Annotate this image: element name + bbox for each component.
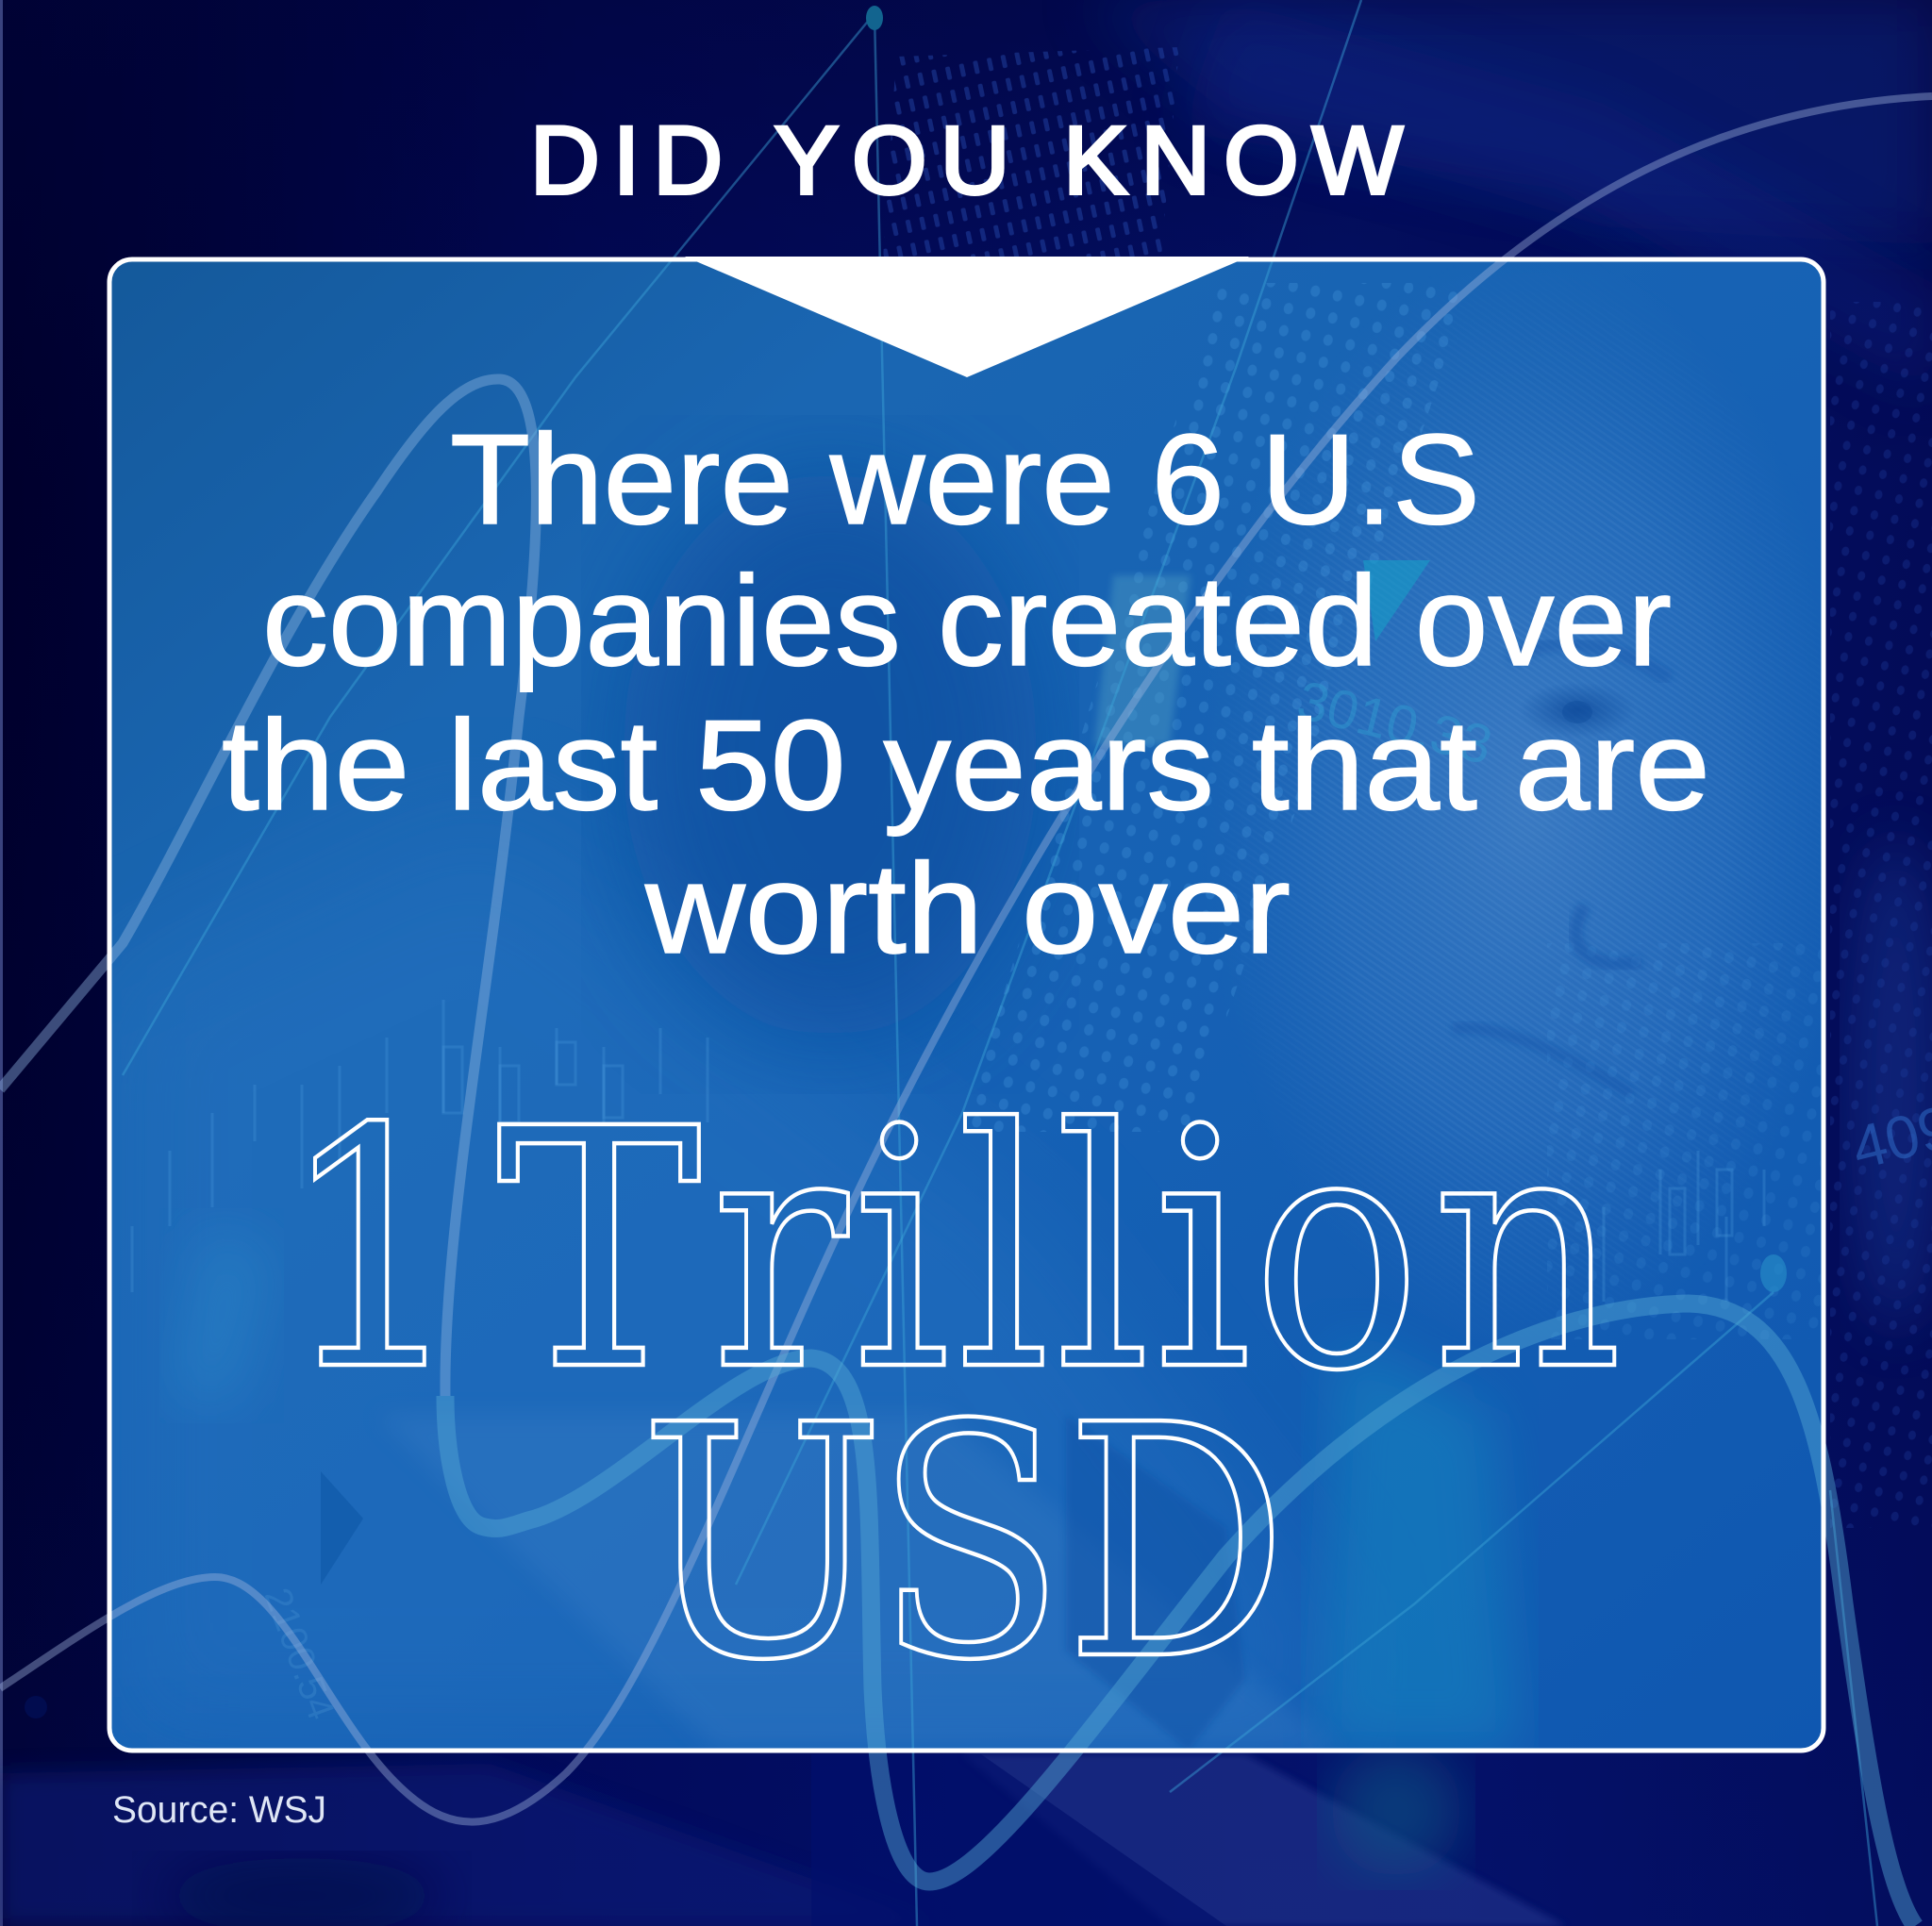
panel: main card fill: 3010.33	[1291, 670, 1498, 776]
text block: statement: companies created over	[262, 549, 1672, 692]
title: DID YOU KNOW	[530, 107, 1403, 214]
icon: white downward arrow tab	[685, 257, 1249, 377]
headline number: 1 Trillion USD: U	[640, 1357, 885, 1731]
panel: main card fill	[109, 236, 1877, 1751]
panel: main card fill: 2100.54	[257, 1583, 341, 1725]
headline number: 1 Trillion USD: i	[1153, 1058, 1252, 1443]
text block: statement	[222, 407, 1710, 980]
headline number: 1 Trillion USD	[279, 1058, 1623, 1731]
headline number: 1 Trillion USD: o	[1253, 1058, 1421, 1443]
headline number: 1 Trillion USD: S	[875, 1357, 1065, 1731]
chart: main curve, thick lower part	[445, 1303, 1915, 1926]
chart: candlesticks	[132, 1000, 1764, 1302]
headline number: 1 Trillion USD: 1	[279, 1058, 466, 1443]
headline number: 1 Trillion USD: D	[1065, 1357, 1288, 1731]
text block: statement: There were 6 U.S	[450, 407, 1480, 551]
chart: main curve, thin rising part	[0, 379, 536, 1396]
source note: Source: WSJ	[112, 1789, 326, 1831]
headline number: 1 Trillion USD: n	[1432, 1058, 1623, 1443]
headline number: 1 Trillion USD: l	[957, 1058, 1051, 1443]
text block: statement: the last 50 years that are	[222, 693, 1710, 837]
headline number: 1 Trillion USD: l	[1055, 1058, 1151, 1443]
headline number: 1 Trillion USD: r	[711, 1058, 850, 1443]
panel: card border	[109, 259, 1824, 1751]
headline number: 1 Trillion USD: T	[496, 1058, 704, 1443]
headline number: 1 Trillion USD: i	[852, 1058, 951, 1443]
text block: statement: worth over	[644, 837, 1291, 980]
